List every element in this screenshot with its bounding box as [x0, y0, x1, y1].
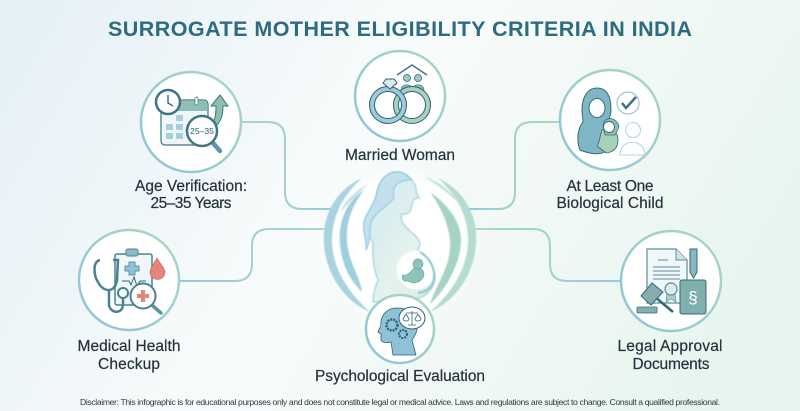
icon: mother with child: [578, 88, 619, 154]
icon: gavel: [637, 283, 673, 313]
connector: age verification: [242, 122, 334, 209]
woman silhouette: [365, 172, 435, 302]
icon: check mark: [617, 92, 639, 114]
icon: pen: [690, 249, 697, 278]
icon circle: legal approval: [621, 231, 721, 331]
icon: seal: [665, 283, 677, 302]
icon: blood drop: [150, 258, 165, 280]
label: checkup: Checkup: [98, 356, 160, 373]
label: biological child: Biological Child: [556, 195, 664, 212]
icon circle: age verification: [141, 72, 241, 172]
icon: house and couple: [397, 65, 427, 90]
icon: clipboard: [115, 249, 152, 305]
womb: [397, 251, 435, 289]
label: age range: 25–35 Years: [150, 195, 232, 212]
title: SURROGATE MOTHER ELIGIBILITY CRITERIA IN INDIA: [108, 17, 692, 41]
icon circle: married woman: [355, 51, 445, 141]
disclaimer: Disclaimer: This infographic is for educational purposes only and does not constitute legal or medical advice. Laws and regulations are subject to change. Consult a qualified professional.: [80, 397, 720, 407]
label: documents: Documents: [632, 356, 710, 373]
belly outline: [418, 252, 434, 293]
icon: stethoscope: [94, 260, 123, 312]
swirl leaves: [324, 176, 476, 312]
icon circle: medical checkup: [79, 230, 179, 330]
icon: rings: [372, 79, 428, 121]
label: legal approval: Legal Approval: [618, 338, 722, 355]
connector: biological child: [466, 122, 560, 209]
icon: magnifier with cross: [130, 284, 161, 313]
icon circle: biological child: [560, 70, 660, 170]
central emblem: pregnant woman: [324, 172, 476, 318]
icon: stethoscope chest piece: [118, 288, 128, 298]
label: at least one: At Least One: [566, 178, 654, 195]
fetus: [402, 259, 424, 283]
icon: document: [647, 249, 687, 303]
label: married woman: Married Woman: [345, 147, 455, 164]
icon: growth arrow: [211, 95, 228, 128]
icon: clock: [156, 90, 180, 114]
label: age verification: Age Verification:: [135, 178, 247, 195]
icon: gears: [386, 320, 407, 338]
connector: medical checkup: [180, 229, 326, 281]
icon: magnifier: 25–35: [190, 126, 214, 136]
label: psychological evaluation: Psychological Evaluation: [315, 368, 485, 385]
icon circle: psychological evaluation: [366, 295, 434, 363]
icon: law book: §: [688, 288, 698, 307]
icon: calendar: [161, 97, 208, 145]
icon: head profile: [378, 308, 418, 355]
icon: thought bubble with scales: [399, 307, 425, 329]
hair: [364, 172, 411, 250]
label: medical health: Medical Health: [78, 338, 180, 355]
icon: second child outline: [620, 122, 645, 155]
connector: legal documents: [474, 229, 620, 281]
